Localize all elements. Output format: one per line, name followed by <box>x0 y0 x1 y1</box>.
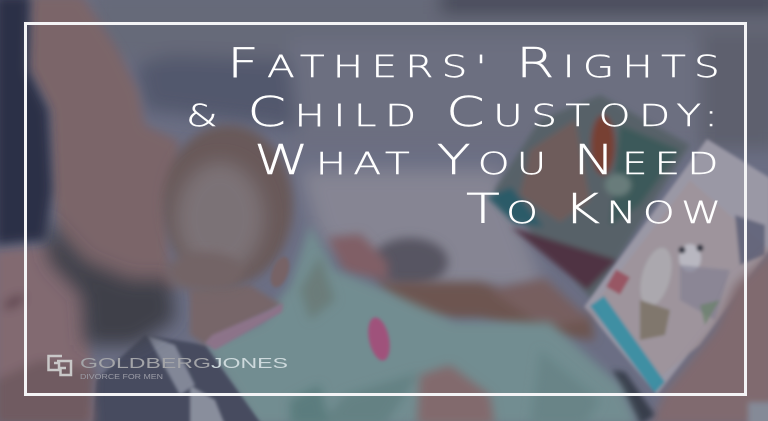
father's skin and beard <box>0 0 182 421</box>
book: dark illustrated page <box>487 95 690 300</box>
onesie pink heart patch <box>365 315 393 363</box>
logo icon <box>48 356 71 375</box>
grey shadow under arm <box>372 238 448 286</box>
baby's head <box>163 125 293 292</box>
title <box>186 40 721 233</box>
dark book shadow <box>612 370 655 421</box>
book: light open page with panda <box>584 139 768 395</box>
baby neck <box>190 285 282 345</box>
title line 2: & C HILD C USTODY: <box>186 89 718 136</box>
room background <box>90 0 768 290</box>
baby's arm and dad's hand <box>328 234 595 340</box>
logo tagline: DIVORCE FOR MEN <box>80 374 163 381</box>
title line 4: TO KNOW <box>466 186 721 233</box>
father's hair <box>0 0 52 245</box>
title line 3: WHAT YOU NEED <box>254 137 718 184</box>
logo: Goldberg Jones <box>48 355 288 381</box>
right hand holding book <box>650 248 768 421</box>
logo wordmark: GOLDBERG JONES <box>80 355 288 372</box>
title line 1: F ATHERS' R IGHTS <box>227 40 720 87</box>
dad's shirt <box>92 335 262 421</box>
baby onesie <box>205 225 638 421</box>
